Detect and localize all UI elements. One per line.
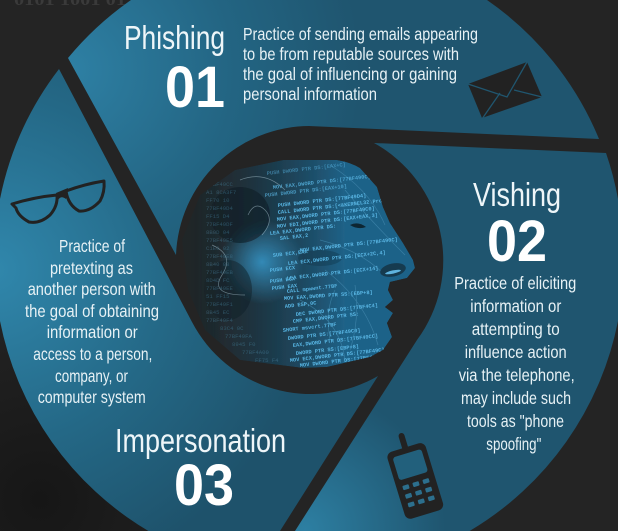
bright code lines: PUSH DWORD PTR DS:[77BF49D4]	[278, 193, 367, 209]
text block: phishing description: personal information	[243, 84, 377, 104]
bright code lines: SAL EAX,2	[280, 233, 309, 242]
dim code column: FF75 F4	[255, 357, 279, 364]
dim code column: 77BF49DF	[206, 221, 233, 228]
bright code lines: DWORD PTR DS:[77BF49C0]	[288, 328, 361, 342]
dim code column: 77BF49EB	[206, 269, 233, 276]
nostril	[380, 263, 406, 277]
text block: impersonation description: pretexting as	[50, 258, 133, 278]
text block: impersonation description	[25, 236, 159, 407]
bright code lines: PUSH ECX	[270, 276, 296, 285]
bright code lines: CALL mpwwnt.77BF	[287, 283, 338, 295]
panel: impersonation segment	[0, 69, 378, 531]
heading: Phishing: Phishing	[124, 19, 225, 56]
dim code column: 77BF49E8	[206, 253, 233, 260]
text block: impersonation description: information or	[47, 322, 138, 342]
text block: vishing description: Practice of eliciting	[454, 273, 576, 293]
number: 02: 02	[487, 209, 547, 274]
dim code column: 77BF49EE	[206, 285, 233, 292]
central head illustration	[204, 160, 415, 368]
dim code column: 77BF4A00	[242, 349, 269, 356]
bright code lines: SUB ECX,EAX	[273, 249, 309, 259]
bright code lines: MOV EAX,DWORD PTR DS:[77BF490C]	[273, 174, 371, 191]
bright code lines: DEC DWORD PTR DS:[77BF4C4]	[296, 303, 378, 318]
text block: vishing description: attempting to	[472, 319, 560, 339]
bright code lines: PUSH DWORD PTR DS:[EAX+10]	[265, 184, 347, 199]
icon: glasses	[12, 181, 104, 222]
bright code lines: ADD ESP,0C	[285, 300, 318, 310]
dim code column: 77BF49F1	[206, 301, 233, 308]
bright code lines: DWORD PTR SS:[EBP+8]	[296, 344, 359, 357]
text block: vishing description: via the telephone,	[459, 365, 575, 385]
text block: phishing description	[243, 24, 478, 104]
bright code lines: SHORT msvcrt.77BF	[283, 322, 337, 334]
bright code lines: EAX,DWORD PTR DS:[77BF49CC]	[293, 333, 379, 349]
dim code column	[206, 181, 279, 364]
bright code lines: LEA ECX,DWORD PTR DS:[ECX+2C,4]	[288, 250, 386, 267]
number: 03: 03	[174, 453, 234, 518]
bright code lines: MOV EAX,DWORD PTR DS:[77BF490C]	[300, 237, 398, 254]
text block: phishing description: Practice of sending emails appearing	[243, 24, 478, 44]
text block: vishing description: information or	[470, 296, 561, 316]
text block: impersonation description: access to a person,	[33, 344, 152, 364]
dim code column: A1 8CA3F7	[206, 189, 236, 196]
bright code lines: CMP EAX,DWORD PTR SS:	[293, 311, 360, 325]
dim code column: 77BF49E5	[206, 237, 233, 244]
text block: vishing description: tools as "phone	[467, 411, 564, 431]
text block: impersonation description: another person with	[28, 279, 156, 299]
bright code lines: PUSH EAX	[272, 283, 298, 292]
bright code lines: LEA EAX,DWORD PTR DS:	[270, 223, 337, 237]
heading: Impersonation: Impersonation	[115, 422, 286, 459]
dim code column: 51 FF15	[206, 293, 230, 300]
dim code column: FF70 10	[206, 197, 230, 204]
text block: vishing description: spoofing"	[486, 434, 541, 454]
dim code column: 77BF49D4	[206, 205, 233, 212]
text block: phishing description: the goal of influencing or gaining	[243, 64, 457, 84]
dim code column: C1E0 02	[206, 245, 230, 252]
text block: impersonation description: company, or	[55, 366, 128, 386]
bright code lines: MOV EAX,DWORD PTR DS:[77BF49C0]	[277, 206, 375, 223]
bright code lines: MOV EAX,DWORD PTR SS:[EBP+8]	[284, 290, 373, 302]
dim code column: FF15 D4	[206, 213, 230, 220]
number: 01: 01	[165, 55, 225, 120]
bright code lines: PUSH ECX	[270, 265, 296, 274]
nostril highlight	[385, 270, 401, 274]
bright code lines: PUSH DWORD PTR DS:[EAX+C]	[267, 162, 346, 177]
panel: vishing segment	[295, 143, 618, 531]
text block: impersonation description: the goal of obtaining	[25, 301, 159, 321]
heading: Vishing: Vishing	[473, 176, 561, 213]
text block: impersonation description: Practice of	[59, 236, 125, 256]
dim code column: 77BF49CC	[206, 181, 233, 188]
dim code column: 8945 F0	[232, 341, 256, 348]
text block: vishing description: influence action	[465, 342, 567, 362]
bright code lines: MOV ECX,DWORD PTR DS:[77BF49C]	[290, 347, 385, 364]
dim code column: 8B40 08	[206, 261, 230, 268]
bright code lines: MOV EDI,DWORD PTR DS:[EAX+EAX,3]	[277, 213, 378, 230]
text block: phishing description: to be from reputable sources with	[243, 44, 459, 64]
dim code column: 8B0D 04	[206, 229, 230, 236]
bright code lines: LEA ECX,DWORD PTR DS:[ECX+14]	[287, 266, 379, 282]
bright code lines: MOV DWORD PTR DS:[77BF4C4]	[300, 354, 382, 369]
text block: vishing description	[454, 273, 576, 454]
dim code column: 77BF49F4	[206, 317, 233, 324]
dim code column: 8B45 EC	[206, 309, 230, 316]
icon: envelope	[468, 62, 542, 119]
text block: impersonation description: computer system	[38, 387, 146, 407]
dim code column: 8D4D FC	[206, 277, 230, 284]
dim code column: 83C4 0C	[220, 325, 244, 332]
eye	[350, 223, 366, 228]
icon: mobile phone	[382, 427, 445, 520]
bright code lines: CALL DWORD PTR DS:[<&KERNEL32.Pro	[278, 198, 382, 216]
dim code column: 77BF49FA	[225, 333, 252, 340]
text block: vishing description: may include such	[461, 388, 571, 408]
bright code lines	[265, 162, 398, 369]
panel: phishing segment	[68, 0, 599, 255]
